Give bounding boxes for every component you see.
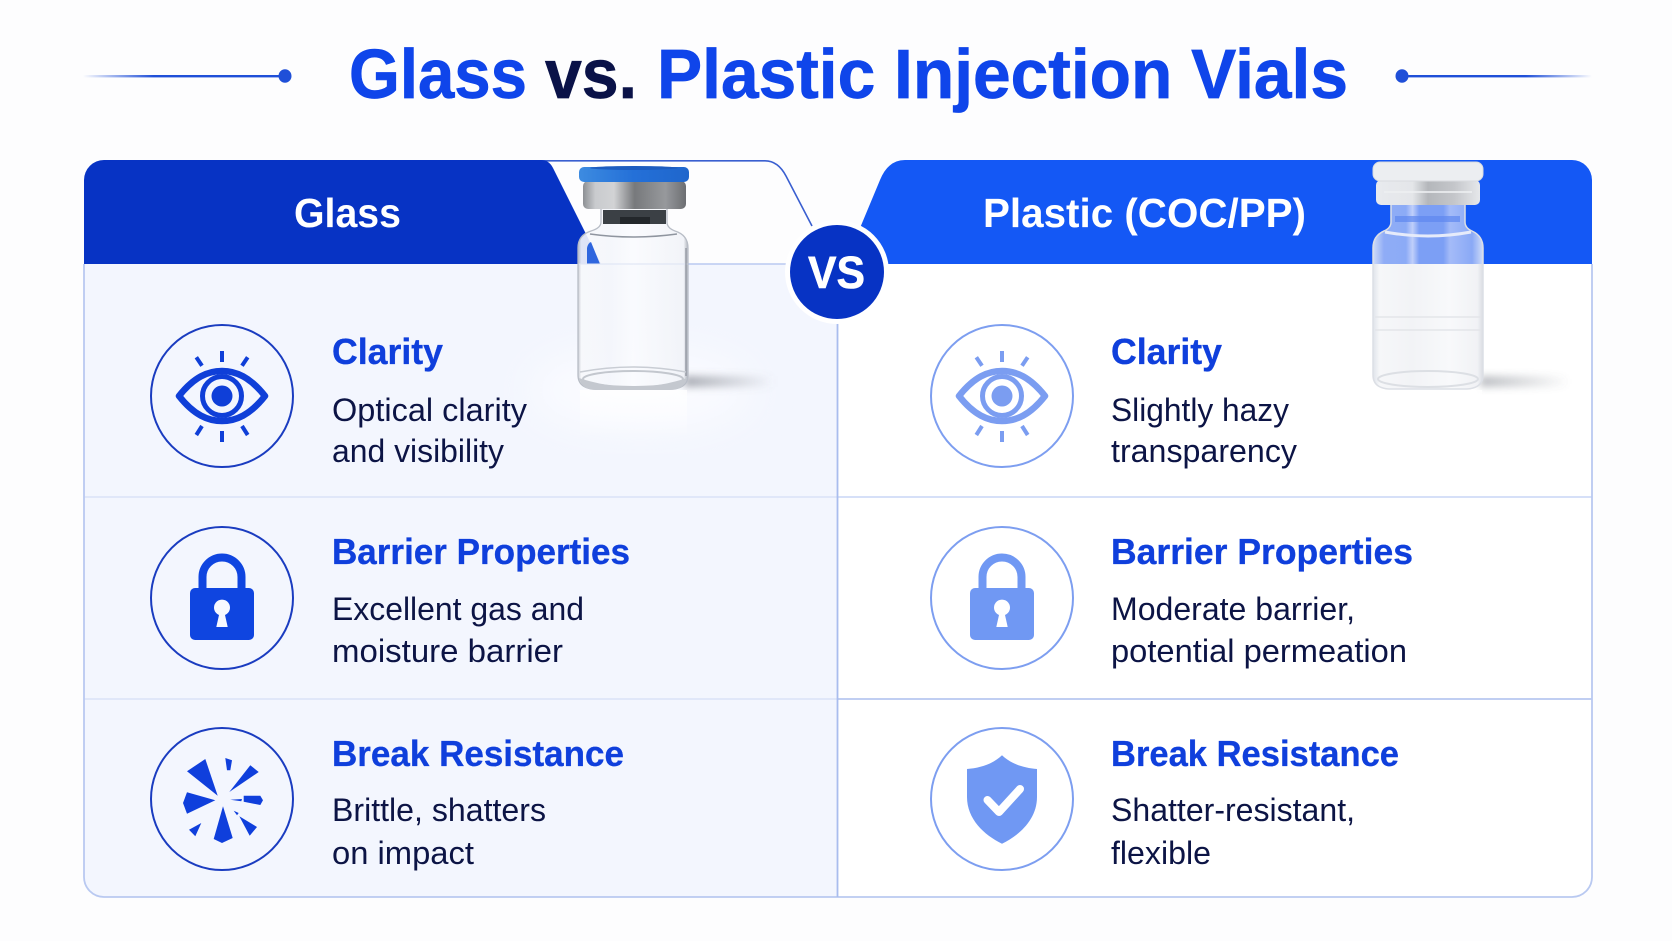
row: break resistance plastic: Shatter-resistant, xyxy=(1111,792,1355,828)
row: barrier glass xyxy=(151,527,630,669)
title: Plastic Injection Vials xyxy=(657,35,1348,113)
row: clarity plastic: transparency xyxy=(1111,433,1298,469)
title: Glass xyxy=(349,35,527,113)
row: break resistance plastic: Break Resistance xyxy=(1111,733,1399,774)
row: barrier plastic: Moderate barrier, xyxy=(1111,591,1355,627)
glass vial xyxy=(578,166,774,438)
row: clarity glass xyxy=(151,325,528,469)
row: clarity plastic xyxy=(931,325,1298,469)
row: barrier plastic xyxy=(931,527,1413,669)
row: barrier glass: Excellent gas and xyxy=(332,591,584,627)
glass header xyxy=(84,160,601,264)
VS badge: VS xyxy=(808,247,865,298)
plastic header: Plastic (COC/PP) xyxy=(983,190,1306,236)
glass header: Glass xyxy=(294,190,401,236)
row: break resistance glass: Brittle, shatters xyxy=(332,792,546,828)
plastic header xyxy=(845,160,1592,264)
row: clarity plastic: Clarity xyxy=(1111,331,1222,372)
panel: glass xyxy=(84,160,838,897)
row: break resistance glass xyxy=(151,728,624,871)
row: barrier plastic: Barrier Properties xyxy=(1111,531,1413,572)
row: barrier plastic: potential permeation xyxy=(1111,633,1407,669)
row: break resistance plastic xyxy=(931,728,1399,871)
row: clarity glass: Clarity xyxy=(332,331,443,372)
row: break resistance glass: on impact xyxy=(332,835,474,871)
VS badge xyxy=(785,220,889,324)
row: clarity glass: Optical clarity xyxy=(332,392,528,428)
row: break resistance glass: Break Resistance xyxy=(332,733,624,774)
row: clarity plastic: Slightly hazy xyxy=(1111,392,1290,428)
plastic vial xyxy=(1373,162,1570,438)
row: break resistance plastic: flexible xyxy=(1111,835,1211,871)
title: vs. xyxy=(545,35,637,113)
row: clarity glass: and visibility xyxy=(332,433,505,469)
row: barrier glass: Barrier Properties xyxy=(332,531,630,572)
title xyxy=(83,35,1592,113)
panel: plastic xyxy=(838,160,1592,897)
row: barrier glass: moisture barrier xyxy=(332,633,563,669)
